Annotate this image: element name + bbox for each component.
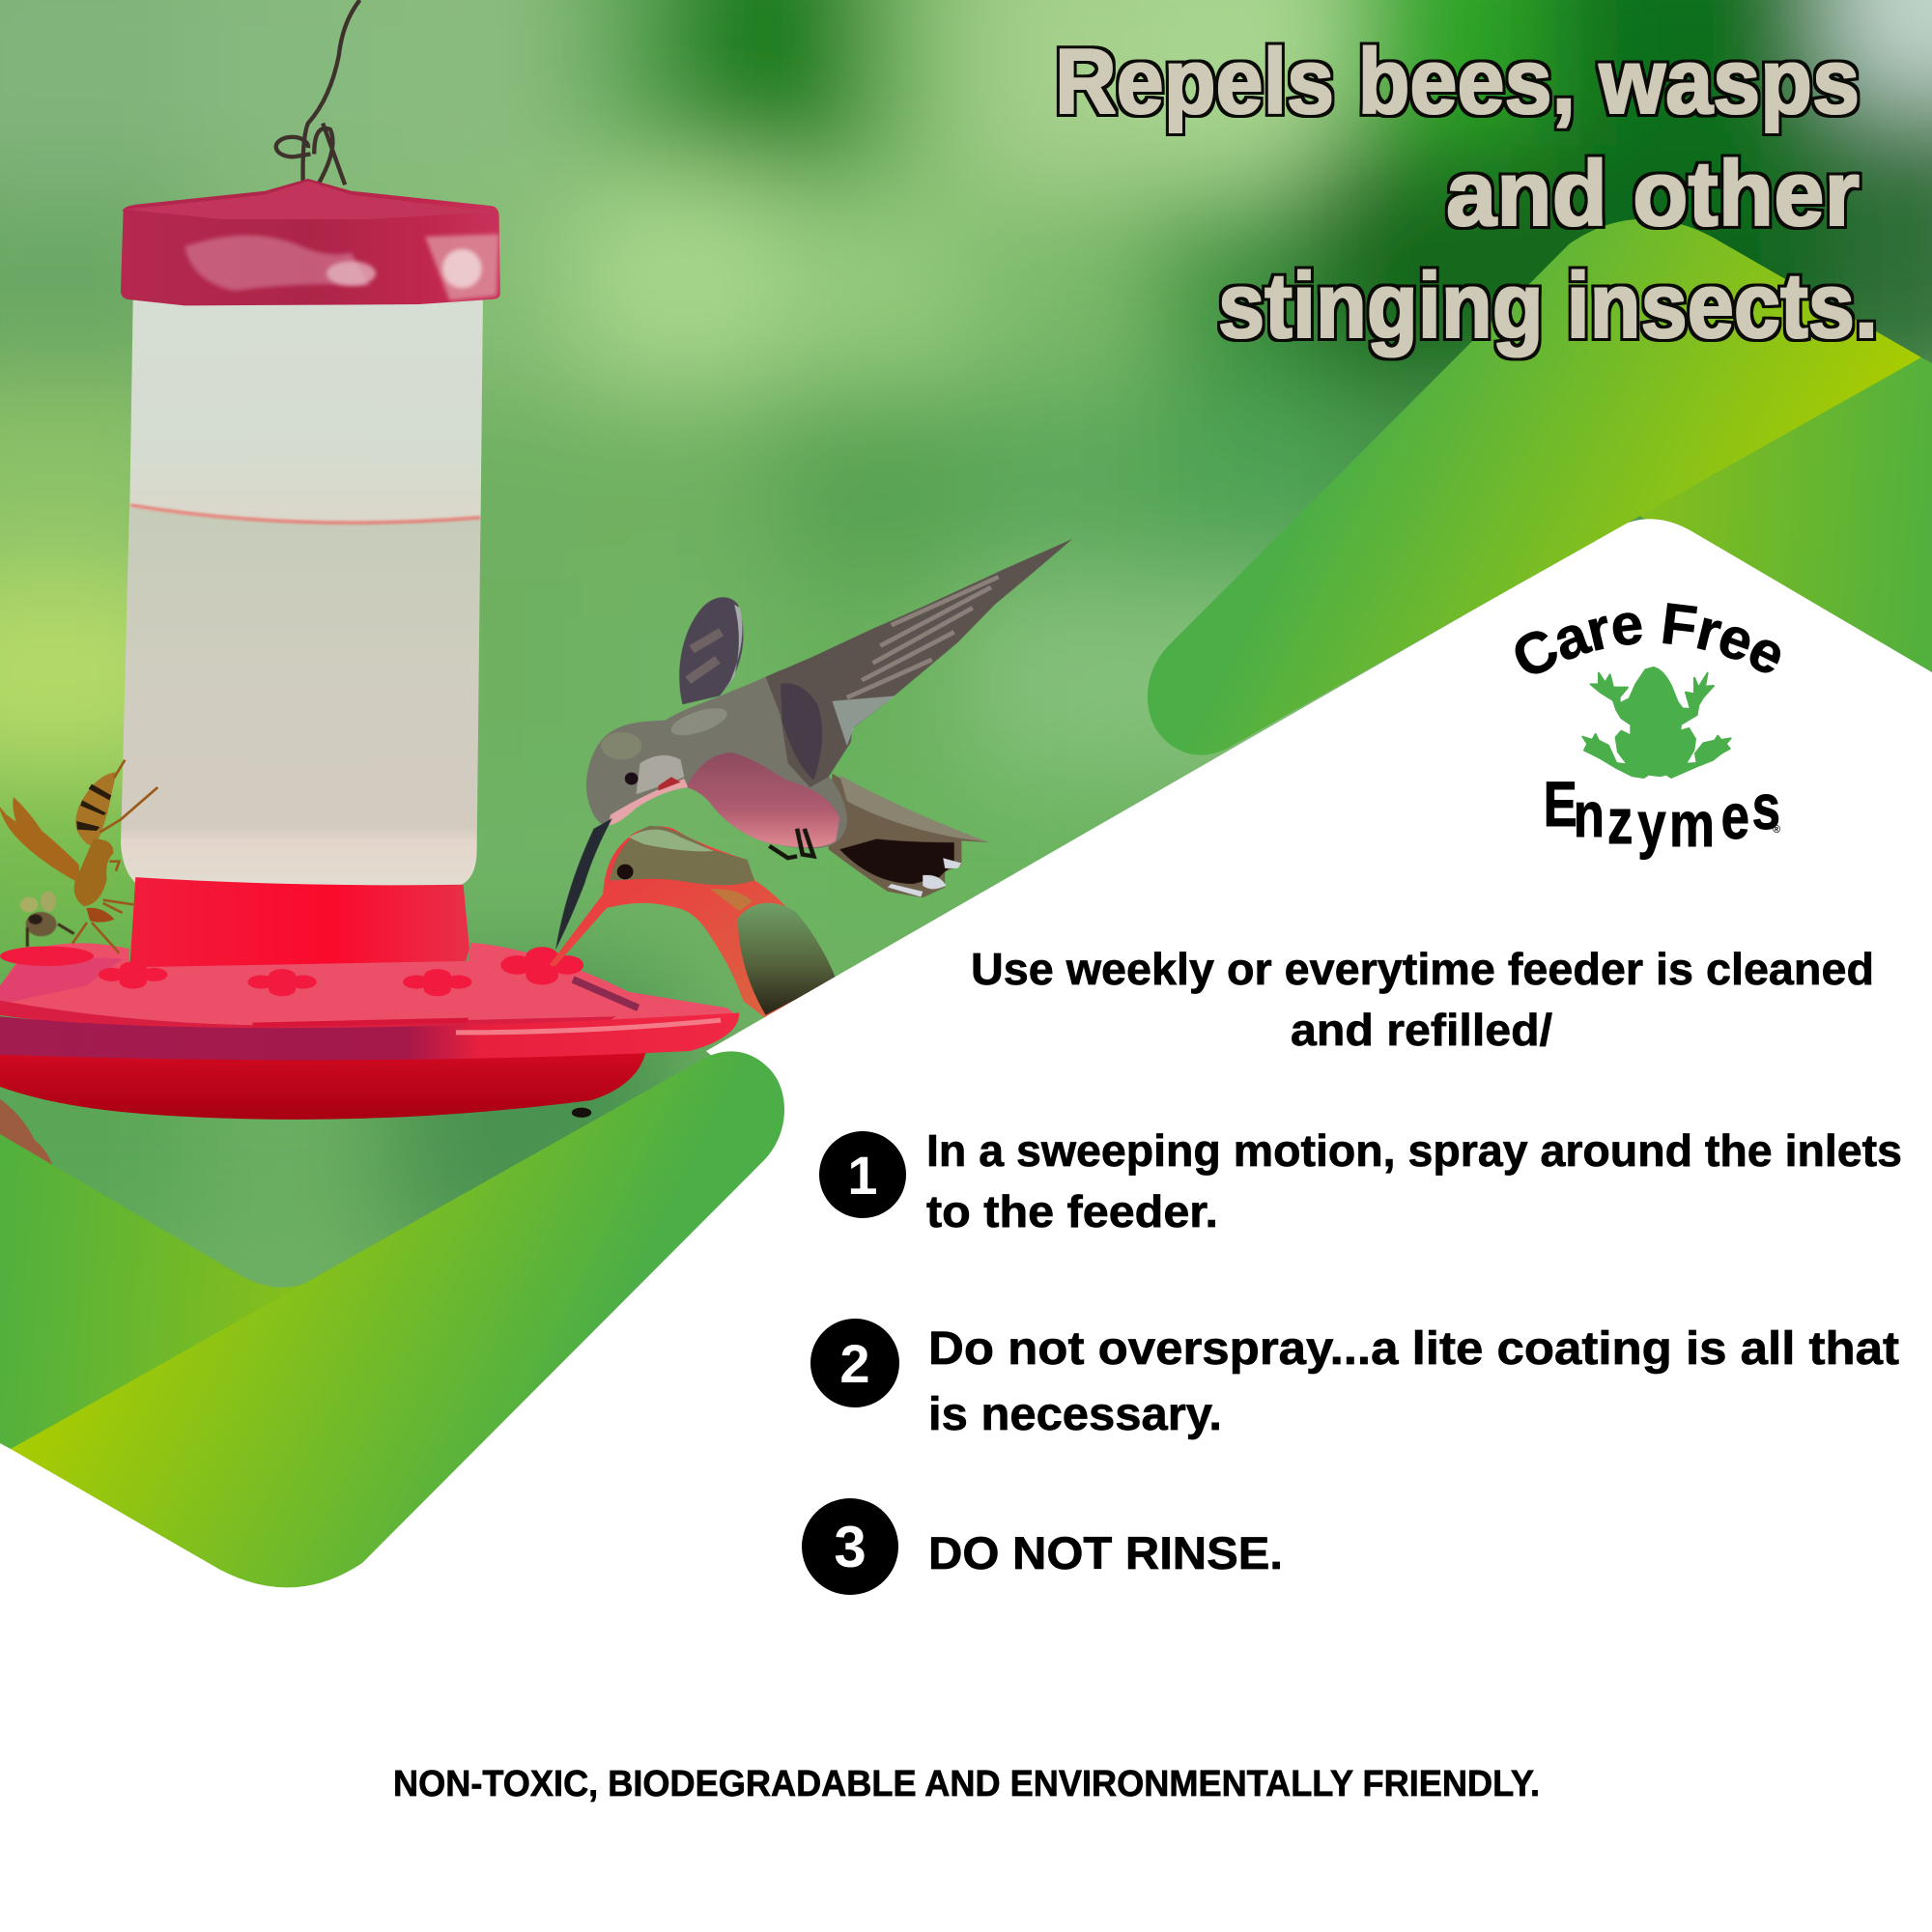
- liquid line: [130, 505, 480, 523]
- wasp thorax: [74, 838, 113, 906]
- instruction intro: [971, 944, 1874, 1055]
- title: and other: [1446, 142, 1860, 245]
- feet: [769, 829, 813, 858]
- bird body: [586, 670, 847, 848]
- registered mark: ®: [1773, 824, 1780, 836]
- instruction intro: Use weekly or everytime feeder is cleaned: [971, 944, 1874, 994]
- near wing: [766, 539, 1072, 787]
- nectar ports: [0, 947, 583, 996]
- logo text: Enzymes: Enzymes: [1544, 768, 1780, 860]
- red collar: [129, 877, 469, 974]
- icon: bee on dish: [20, 892, 74, 947]
- cap: [121, 179, 500, 305]
- title: Repels bees, wasps: [1055, 30, 1860, 133]
- tail: [829, 774, 989, 897]
- title: stinging insects.: [1218, 254, 1878, 357]
- dish rim: [0, 1012, 739, 1060]
- icon: wasp on jar: [0, 760, 157, 953]
- step 3: [802, 1498, 1283, 1595]
- dish: [0, 943, 739, 1120]
- wasp wings: [0, 797, 80, 884]
- green chevron: lower left: [11, 1051, 784, 1587]
- step 1 text: to the feeder.: [926, 1186, 1218, 1236]
- green shape: lower left darker band: [0, 1134, 328, 1449]
- lower left flower fragment: [0, 1099, 54, 1171]
- far wing: [679, 597, 743, 704]
- step 3 text: DO NOT RINSE.: [928, 1527, 1283, 1578]
- bird head speckle: [601, 732, 641, 759]
- footer statement: NON-TOXIC, BIODEGRADABLE AND ENVIRONMENTALLY FRIENDLY.: [393, 1764, 1540, 1804]
- beak: [555, 818, 612, 950]
- step 1 text: In a sweeping motion, spray around the inlets: [926, 1125, 1902, 1176]
- step 1: [819, 1125, 1902, 1236]
- step 2 text: is necessary.: [928, 1389, 1222, 1440]
- logo: Care Free Enzymes: [1515, 603, 1781, 860]
- background photo: blurred green foliage: [0, 0, 1932, 1449]
- icon: hanging wire: [276, 0, 359, 185]
- logo text: Care Free: Care Free: [1515, 603, 1781, 674]
- step 1 badge: [819, 1131, 906, 1218]
- insect on bowl edge: [572, 1108, 591, 1118]
- lower bird body: [550, 826, 836, 1018]
- lower hummingbird: [550, 826, 836, 1018]
- step 2 text: [928, 1323, 1899, 1440]
- green chevron: upper right: [1148, 219, 1921, 755]
- step 1 number: 1: [847, 1145, 878, 1206]
- jar upper empty section: [129, 296, 483, 529]
- title: [1055, 30, 1878, 357]
- lower bird wing: [738, 903, 836, 1015]
- white content panel: [0, 519, 1932, 1932]
- step 2 badge: [810, 1319, 899, 1407]
- jar liquid section: [121, 508, 480, 887]
- lower bird crown: [610, 826, 754, 885]
- icon: green frog: [1582, 668, 1731, 778]
- step 2: [810, 1319, 1899, 1440]
- step 2 number: 2: [839, 1333, 870, 1394]
- wasp legs: [72, 760, 157, 953]
- step 3 badge: [802, 1498, 898, 1595]
- step 3 number: 3: [834, 1515, 867, 1579]
- belly: [686, 753, 839, 847]
- instruction intro: and refilled/: [1291, 1005, 1552, 1055]
- wasp abdomen: [75, 772, 117, 845]
- dish lower bowl: [0, 1047, 647, 1120]
- step 2 text: Do not overspray...a lite coating is all that: [928, 1323, 1899, 1375]
- upper hummingbird: [555, 539, 1072, 950]
- green shape: upper right darker band: [1633, 357, 1932, 681]
- feeder: [0, 0, 739, 1171]
- dish top surface: [0, 943, 736, 1037]
- step 1 text: [926, 1125, 1902, 1236]
